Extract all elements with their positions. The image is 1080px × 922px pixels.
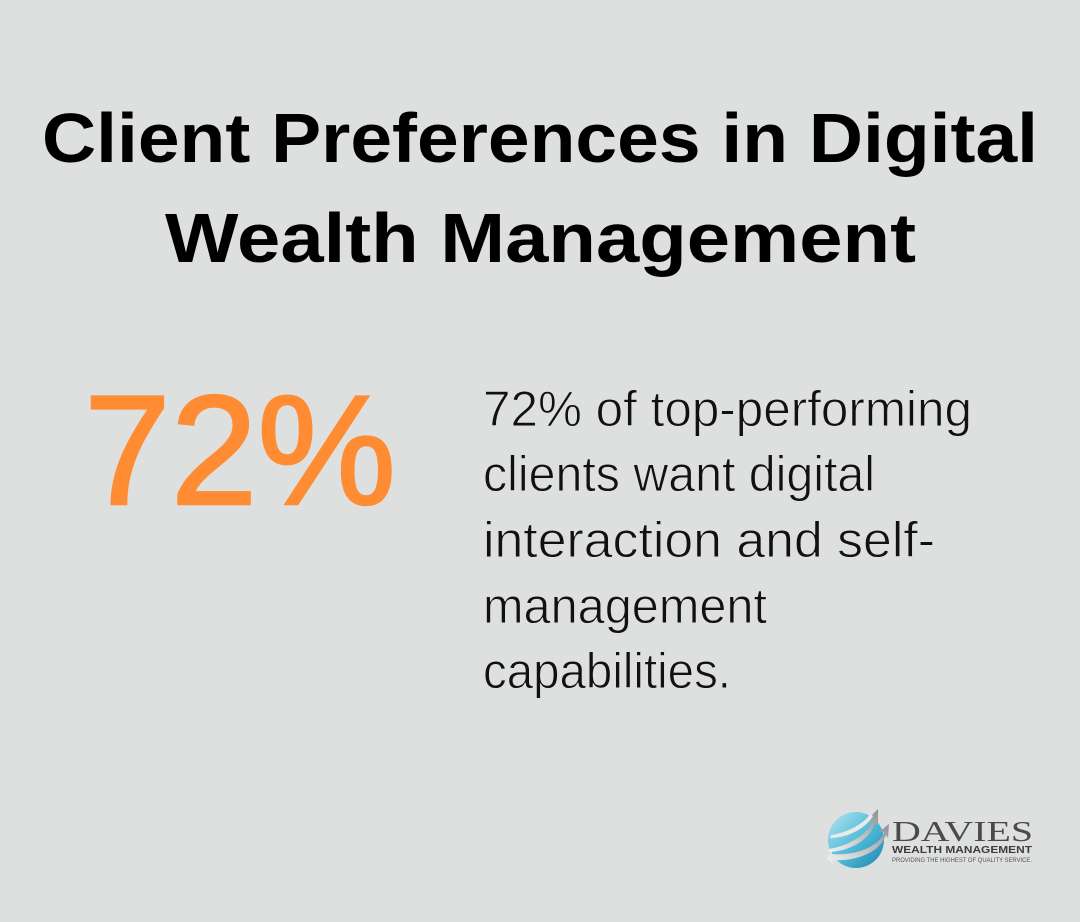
title: Client Preferences in Digital: [42, 99, 1038, 177]
logo wordmark: DAVIES: [892, 817, 1033, 848]
big statistic: 72%: 72%: [84, 364, 396, 538]
description text: capabilities.: [483, 643, 731, 699]
logo: Davies Wealth Management: [827, 809, 1033, 868]
logo tagline: PROVIDING THE HIGHEST OF QUALITY SERVICE.: [892, 857, 1032, 864]
title: [42, 99, 1038, 277]
logo subtitle: WEALTH MANAGEMENT: [892, 844, 1033, 856]
description text: clients want digital: [483, 446, 875, 502]
title: Wealth Management: [165, 199, 916, 277]
description text: 72% of top-performing: [483, 381, 972, 437]
description text: management: [483, 578, 767, 634]
description text: [483, 381, 972, 699]
description text: interaction and self-: [483, 512, 935, 568]
icon: globe with arrows: [827, 809, 889, 868]
